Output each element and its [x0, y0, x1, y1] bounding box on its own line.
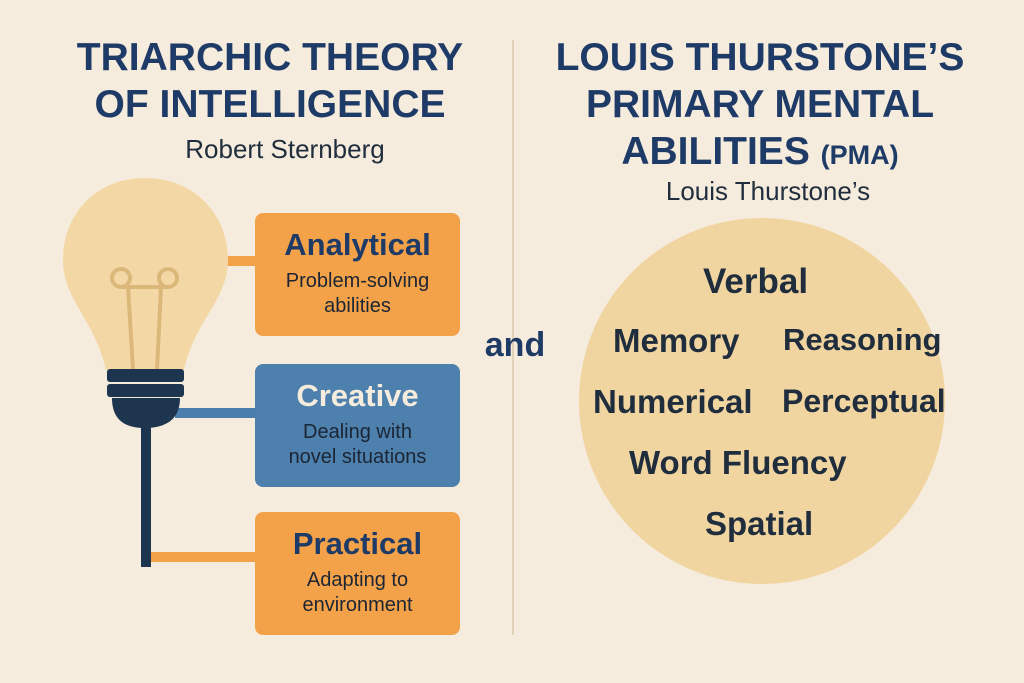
circle: abilities: Perceptual	[782, 383, 946, 419]
title: triarchic: TRIARCHIC THEORY	[77, 36, 463, 79]
box: Practical: environment	[302, 594, 413, 616]
circle: abilities: Reasoning	[783, 322, 941, 357]
subtitle: Louis Thurstone's: Louis Thurstone’s	[666, 176, 870, 206]
title: thurstone: ABILITIES (PMA)	[621, 130, 899, 173]
box: Analytical: abilities	[324, 295, 391, 317]
box: Analytical: Problem-solving	[286, 270, 429, 292]
circle: abilities	[579, 218, 945, 584]
title: thurstone: LOUIS THURSTONE’S	[556, 36, 964, 79]
circle: abilities: Numerical	[593, 383, 753, 420]
divider	[512, 40, 514, 635]
box: Creative: Dealing with	[303, 421, 412, 443]
box: Practical	[255, 512, 460, 635]
icon: light bulb with connectors	[63, 178, 255, 567]
subtitle: Robert Sternberg: Robert Sternberg	[185, 134, 385, 164]
title: triarchic: OF INTELLIGENCE	[94, 83, 446, 126]
box: Creative	[255, 364, 460, 487]
box: Creative: novel situations	[289, 446, 426, 468]
box: Practical: Adapting to	[307, 569, 408, 591]
circle: abilities: Verbal	[703, 262, 808, 301]
box: Analytical	[255, 213, 460, 336]
title: thurstone: PRIMARY MENTAL	[586, 83, 934, 126]
box: Analytical: Analytical	[284, 227, 431, 262]
circle: abilities: Word Fluency	[629, 444, 847, 481]
circle: abilities: Memory	[613, 322, 740, 359]
box: Practical: Practical	[293, 526, 422, 561]
title: triarchic	[77, 36, 463, 126]
box: Creative: Creative	[296, 378, 419, 413]
circle: abilities: Spatial	[705, 505, 813, 542]
title: thurstone	[556, 36, 964, 173]
text: and: and	[485, 326, 545, 364]
